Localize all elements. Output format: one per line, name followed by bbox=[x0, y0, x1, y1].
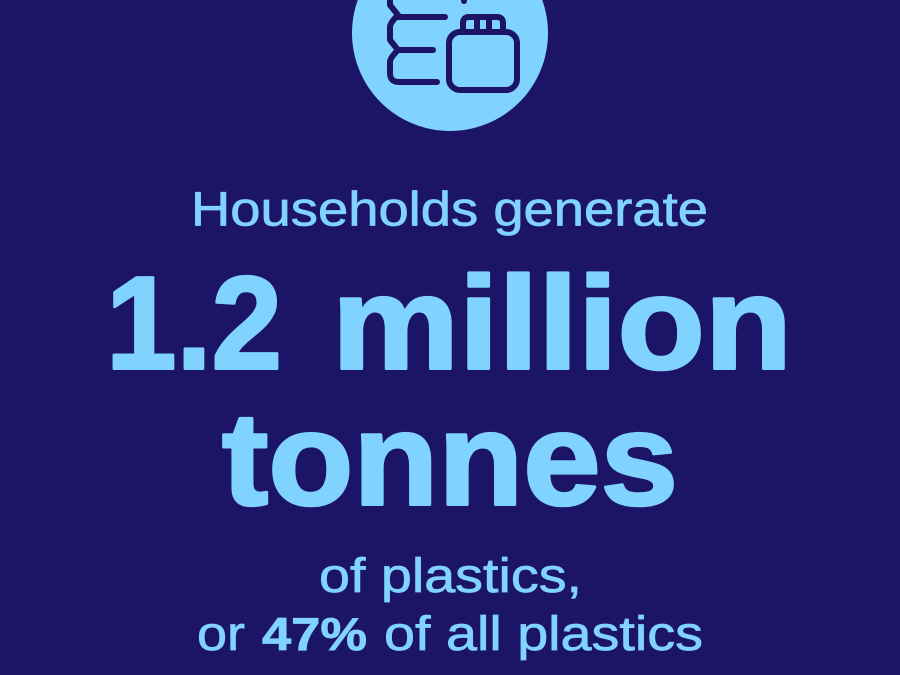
text: or 47% of all plastics: of all plastics bbox=[384, 608, 703, 661]
icon: plastic bottle and jar in circle bbox=[352, 0, 548, 131]
text: of plastics: of plastics, bbox=[319, 550, 582, 603]
text: or 47% of all plastics: 47% bbox=[262, 608, 367, 660]
statistic: 1.2 million: 1.2 bbox=[106, 250, 282, 396]
statistic: 1.2 million: million bbox=[332, 250, 792, 396]
text: households generate: Households generate bbox=[191, 184, 708, 236]
text: or 47% of all plastics bbox=[197, 608, 703, 661]
text: or 47% of all plastics: or bbox=[197, 608, 245, 661]
statistic: tonnes: tonnes bbox=[222, 386, 678, 532]
statistic: 1.2 million bbox=[106, 250, 792, 396]
